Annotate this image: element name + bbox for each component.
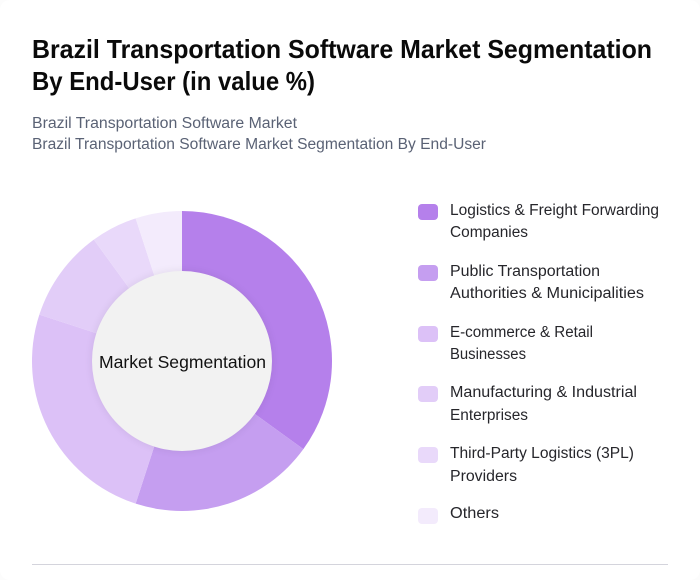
title: Brazil Transportation Software Market Segmentation [32, 34, 652, 64]
legend item: Third-Party Logistics (3PL) Providers [418, 445, 634, 485]
legend [418, 202, 659, 524]
legend item: Manufacturing & Industrial Enterprises: Enterprises [450, 407, 528, 424]
center circle [92, 271, 272, 451]
donut chart [32, 211, 332, 511]
legend item: Third-Party Logistics (3PL) Providers: Third-Party Logistics (3PL) [450, 445, 634, 462]
title: By End-User (in value %) [32, 66, 315, 96]
legend item: Logistics & Freight Forwarding Companies [418, 202, 659, 241]
legend item: Manufacturing & Industrial Enterprises: Manufacturing & Industrial [450, 384, 637, 401]
legend item: Logistics & Freight Forwarding Companies: Logistics & Freight Forwarding [450, 202, 659, 219]
legend item: Logistics & Freight Forwarding Companies: Companies [450, 224, 528, 241]
legend item: Public Transportation Authorities & Municipalities [418, 263, 644, 302]
legend item: E-commerce & Retail Businesses: Businesses [450, 346, 526, 363]
slice: E-commerce & Retail Businesses [32, 315, 182, 504]
legend item: Public Transportation Authorities & Municipalities: Authorities & Municipalities [450, 285, 644, 302]
slice: Manufacturing & Industrial Enterprises [39, 240, 182, 361]
subtitle [32, 115, 486, 153]
slice: Public Transportation Authorities & Municipalities [136, 361, 303, 511]
center label: Market Segmentation [99, 352, 266, 372]
legend item: Others [418, 505, 499, 524]
slice: Logistics & Freight Forwarding Companies [182, 211, 332, 449]
legend item: E-commerce & Retail Businesses: E-commerce & Retail [450, 324, 593, 341]
legend item: Manufacturing & Industrial Enterprises [418, 384, 637, 424]
subtitle: Brazil Transportation Software Market Segmentation By End-User [32, 136, 486, 153]
title [32, 34, 652, 96]
slice: Others [136, 211, 182, 361]
slice: Third-Party Logistics (3PL) Providers [94, 218, 182, 361]
legend item: E-commerce & Retail Businesses [418, 324, 593, 363]
subtitle: Brazil Transportation Software Market [32, 115, 298, 132]
legend item: Others: Others [450, 505, 499, 522]
legend item: Public Transportation Authorities & Municipalities: Public Transportation [450, 263, 600, 280]
legend item: Third-Party Logistics (3PL) Providers: Providers [450, 468, 517, 485]
